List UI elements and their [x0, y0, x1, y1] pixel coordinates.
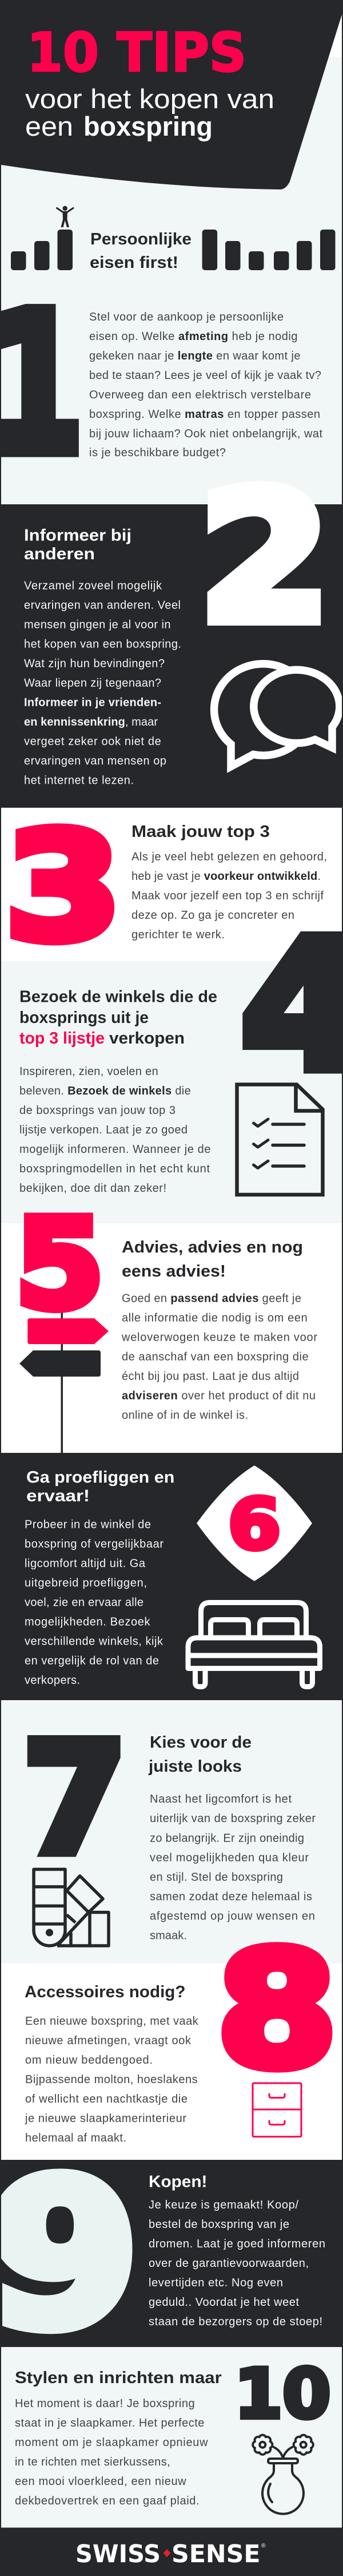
heading tip 3: Maak jouw top 3	[131, 823, 270, 841]
body tip 6: ligcomfort altijd uit. Ga	[25, 1557, 146, 1570]
body tip 8: helemaal af maakt.	[25, 2132, 126, 2144]
body tip 2: en kennissenkring, maar	[24, 716, 158, 728]
body tip 4: de boxsprings van jouw top 3	[19, 1104, 176, 1117]
body tip 8: Bijpassende molton, hoeslakens	[25, 2073, 198, 2086]
body tip 5: weloverwogen keuze te maken voor	[121, 1332, 317, 1344]
panel: tip 5	[1, 1193, 342, 1453]
heading tip 5: Advies, advies en nog	[122, 1238, 303, 1257]
number 5: 5	[15, 1193, 105, 1337]
number 8: 8	[217, 1918, 337, 2103]
heading tip 7: Kies voor de	[150, 1733, 252, 1752]
body tip 2: Wat zijn hun bevindingen?	[24, 657, 165, 670]
body tip 2: Verzamel zoveel mogelijk	[24, 579, 162, 592]
body tip 4: mogelijk informeren. Wanneer je de	[19, 1143, 210, 1156]
body tip 3: Maak voor jezelf een top 3 en schrijf	[131, 890, 324, 902]
body tip 9: dromen. Laat je goed informeren	[149, 2238, 325, 2250]
body tip 10: Het moment is daar! Je boxspring	[15, 2397, 195, 2410]
body tip 3	[131, 851, 327, 941]
body tip 8: je nieuwe slaapkamerinterieur	[25, 2112, 186, 2125]
body tip 7: smaak.	[150, 1929, 187, 1942]
heading tip 2: Informeer bij	[24, 527, 131, 545]
heading tip 5: eens advies!	[122, 1262, 226, 1281]
panel: tip 9	[1, 2168, 325, 2334]
body tip 9: over de garantievoorwaarden,	[149, 2257, 309, 2270]
body tip 9: geduld.. Voordat je het weet	[149, 2296, 299, 2309]
body tip 9	[149, 2199, 325, 2328]
footer logo: SENSE	[172, 2540, 261, 2569]
body tip 8: Een nieuwe boxspring, met vaak	[25, 2015, 199, 2028]
body tip 2	[24, 579, 181, 787]
body tip 9: Je keuze is gemaakt! Koop/	[149, 2199, 298, 2211]
body tip 1: Stel voor de aankoop je persoonlijke	[89, 311, 284, 323]
body tip 2: ervaringen van anderen. Veel	[24, 599, 181, 611]
heading tip 6	[26, 1468, 174, 1506]
icon: signpost	[19, 1308, 109, 1453]
heading tip 4: Bezoek de winkels die de	[19, 988, 217, 1006]
body tip 4: boxspringmodellen in het echt kunt	[19, 1163, 210, 1175]
footer logo	[75, 2540, 266, 2569]
body tip 1: boxspring. Welke matras en topper passen	[89, 408, 320, 421]
body tip 1: Overweeg dan een elektrisch verstelbare	[89, 389, 311, 401]
body tip 8: nieuwe afmetingen, vraagt ook	[25, 2034, 192, 2047]
icon: drawers	[253, 2083, 301, 2136]
panel: tip 8	[1, 1918, 342, 2160]
heading tip 10: Stylen en inrichten maar	[15, 2369, 222, 2387]
body tip 7	[150, 1793, 316, 1942]
icon: bed	[188, 1603, 320, 1686]
icon: vase with flowers	[253, 2435, 313, 2514]
body tip 9: levertijden etc. Nog even	[149, 2277, 283, 2289]
icon: bar podium left with person	[11, 206, 73, 270]
panel: tip 2	[0, 454, 343, 808]
body tip 3: gerichter te werk.	[131, 929, 225, 941]
number 10: 10	[234, 2355, 330, 2434]
body tip 6: uitgebreid proefliggen,	[25, 1577, 147, 1589]
body tip 1: is je beschikbare budget?	[89, 447, 226, 459]
body tip 6: verkopers.	[25, 1674, 80, 1686]
body tip 6: boxspring of vergelijkbaar	[25, 1538, 163, 1550]
body tip 1	[89, 311, 322, 459]
panel: tip 10	[1, 2347, 342, 2528]
subtitle: voor het kopen van	[25, 84, 274, 114]
body tip 9: bestel de boxspring van je	[149, 2218, 289, 2231]
body tip 4: Inspireren, zien, voelen en	[19, 1065, 158, 1078]
body tip 5	[121, 1293, 317, 1422]
body tip 2: het kopen van een boxspring.	[24, 638, 181, 650]
heading tip 4: verkopen	[109, 1029, 185, 1048]
header shape	[0, 0, 343, 189]
icon: colour swatches	[34, 1870, 109, 1946]
heading tip 2	[24, 527, 131, 563]
heading tip 8: Accessoires nodig?	[25, 1983, 185, 2001]
body tip 4: beleven. Bezoek de winkels die	[19, 1085, 191, 1097]
body tip 5: alle informatie die nodig is om een	[122, 1312, 308, 1325]
body tip 5: de aanschaf van een boxspring die	[122, 1351, 309, 1364]
heading tip 7: juiste looks	[148, 1757, 242, 1776]
body tip 3: Als je veel hebt gelezen en gehoord,	[131, 851, 327, 863]
body tip 10: moment om je slaapkamer opnieuw	[15, 2436, 208, 2449]
body tip 7: zo belangrijk. Er zijn oneindig	[150, 1832, 304, 1844]
number 7: 7	[22, 1710, 127, 1888]
heading tip 1: eisen first!	[90, 254, 178, 272]
body tip 6: verschillende winkels, kijk	[25, 1635, 163, 1647]
body tip 6: en vergelijk de rol van de	[25, 1654, 159, 1667]
body tip 6: mogelijkheden. Bezoek	[25, 1615, 151, 1628]
heading tip 1: Persoonlijke	[90, 230, 192, 248]
icon: white diamond	[197, 1465, 312, 1581]
footer logo: SWISS	[75, 2540, 161, 2569]
body tip 8: of wellicht een nachtkastje die	[25, 2093, 188, 2105]
body tip 7: afgestemd op jouw wensen en	[150, 1910, 315, 1922]
body tip 2: Informeer in je vrienden-	[24, 696, 161, 709]
heading tip 2: anderen	[24, 545, 95, 563]
panel: tip 3	[1, 801, 342, 973]
body tip 2: ervaringen van mensen op	[24, 754, 166, 767]
body tip 5: écht bij jou past. Laat je dus altijd	[122, 1370, 299, 1383]
body tip 3: deze op. Zo ga je concreter en	[131, 909, 294, 922]
body tip 4: bekijken, doe dit dan zeker!	[19, 1182, 166, 1195]
body tip 1: eisen op. Welke afmeting heb je nodig	[89, 330, 297, 343]
panel: tip 4	[1, 902, 343, 1223]
body tip 6: Probeer in de winkel de	[25, 1518, 151, 1531]
body tip 9: staan de bezorgers op de stoep!	[149, 2316, 322, 2328]
icon: bars right	[202, 230, 335, 270]
heading tip 5	[122, 1238, 303, 1281]
panel: tip 7	[1, 1700, 342, 1963]
number 3: 3	[5, 801, 122, 973]
body tip 5: online of in de winkel is.	[122, 1409, 248, 1422]
body tip 1: bed te staan? Lees je veel of kijk je vaak tv?	[89, 369, 321, 382]
body tip 7: Naast het ligcomfort is het	[150, 1793, 292, 1805]
body tip 6	[25, 1518, 163, 1686]
body tip 5: Goed en passend advies geeft je	[122, 1293, 301, 1305]
subtitle: een	[25, 111, 73, 141]
title: 10 TIPS	[27, 22, 246, 84]
panel: tip 1	[0, 206, 335, 496]
body tip 10: dekbedovertrek en een gaaf plaid.	[15, 2495, 200, 2507]
number 2: 2	[199, 454, 330, 662]
heading tip 4: boxsprings uit je	[19, 1009, 149, 1027]
icon: checklist document	[237, 1084, 322, 1195]
heading tip 9: Kopen!	[149, 2173, 207, 2191]
heading tip 7	[148, 1733, 252, 1776]
subtitle: boxspring	[83, 111, 213, 141]
body tip 10: in te richten met sierkussens,	[15, 2456, 170, 2468]
heading tip 6: Ga proefliggen en	[26, 1468, 174, 1487]
heading tip 6: ervaar!	[26, 1487, 90, 1506]
body tip 2: vergeet zeker ook niet de	[24, 735, 161, 748]
body tip 1: bij jouw lichaam? Ook niet onbelangrijk, wat	[89, 428, 322, 440]
body tip 10	[15, 2397, 208, 2507]
body tip 10: een mooi vloerkleed, een nieuw	[15, 2475, 186, 2488]
body tip 10: staat in je slaapkamer. Het perfecte	[15, 2417, 204, 2429]
body tip 7: veel mogelijkheden qua kleur	[150, 1851, 309, 1864]
footer logo: ®	[261, 2543, 266, 2549]
body tip 7: uiterlijk van de boxspring zeker	[150, 1812, 316, 1825]
body tip 8: om nieuw beddengoed.	[25, 2054, 153, 2067]
body tip 4	[19, 1065, 210, 1195]
number 6: 6	[228, 1484, 281, 1566]
body tip 2: mensen gingen je al voor in	[24, 618, 170, 631]
body tip 8	[25, 2015, 199, 2144]
icon: red diamond	[163, 2549, 170, 2557]
subtitle	[25, 84, 274, 141]
body tip 3: heb je vast je voorkeur ontwikkeld.	[131, 870, 321, 883]
heading tip 4	[19, 988, 217, 1048]
heading tip 4: top 3 lijstje	[19, 1029, 105, 1048]
body tip 4: lijstje verkopen. Laat je zo goed	[19, 1124, 188, 1136]
icon: speech bubbles	[214, 664, 340, 767]
heading tip 1	[90, 230, 192, 272]
panel: tip 6	[0, 1453, 343, 1700]
body tip 2: het internet te lezen.	[24, 774, 134, 787]
body tip 5: adviseren over het product of dit nu	[122, 1390, 316, 1402]
body tip 7: samen zodat deze helemaal is	[150, 1890, 312, 1903]
body tip 2: Waar liepen zij tegenaan?	[24, 677, 161, 689]
body tip 7: en stijl. Stel de boxspring	[150, 1871, 283, 1883]
panel: header	[0, 0, 343, 505]
body tip 6: voel, zie en ervaar alle	[25, 1596, 143, 1609]
body tip 1: gekeken naar je lengte en waar komt je	[89, 350, 301, 362]
